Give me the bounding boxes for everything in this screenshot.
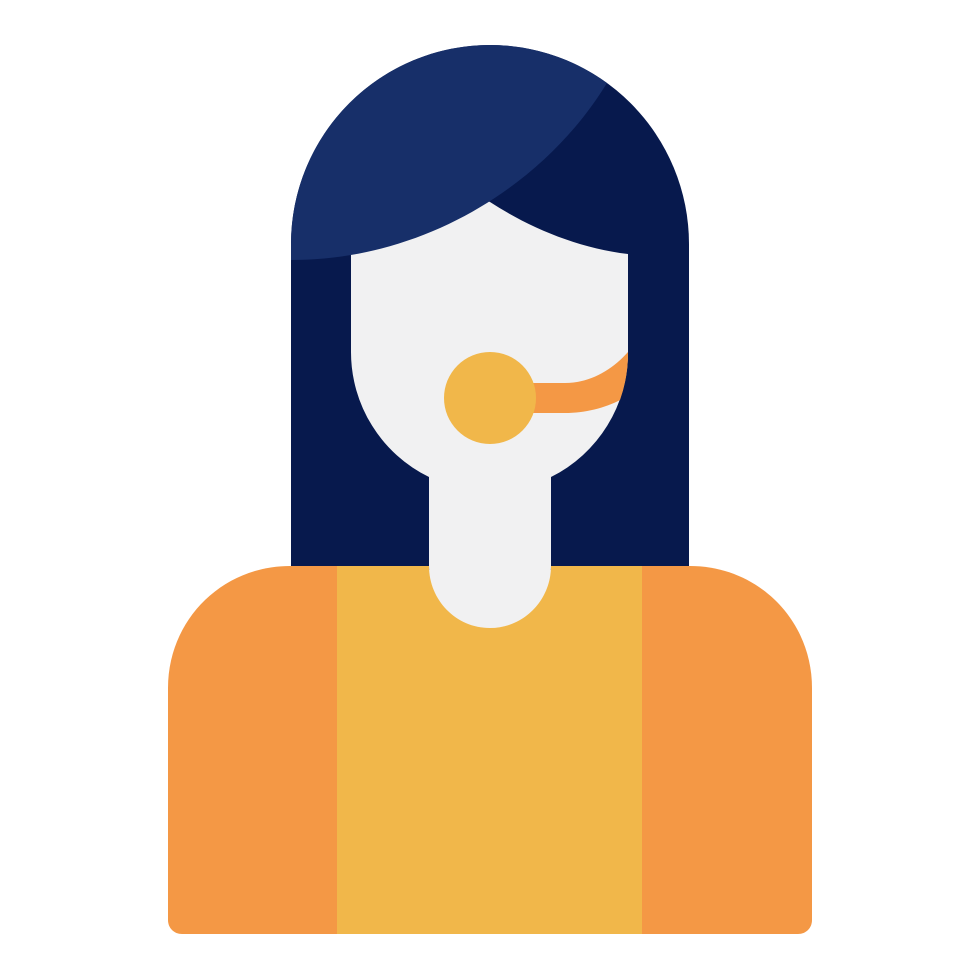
face [351, 200, 628, 628]
shirt centre [337, 566, 642, 934]
hair highlight [291, 45, 607, 260]
headset microphone [444, 352, 536, 444]
headset microphone arm [530, 352, 628, 413]
right shoulder [642, 566, 812, 934]
left shoulder [168, 566, 337, 934]
hair back [291, 45, 689, 570]
